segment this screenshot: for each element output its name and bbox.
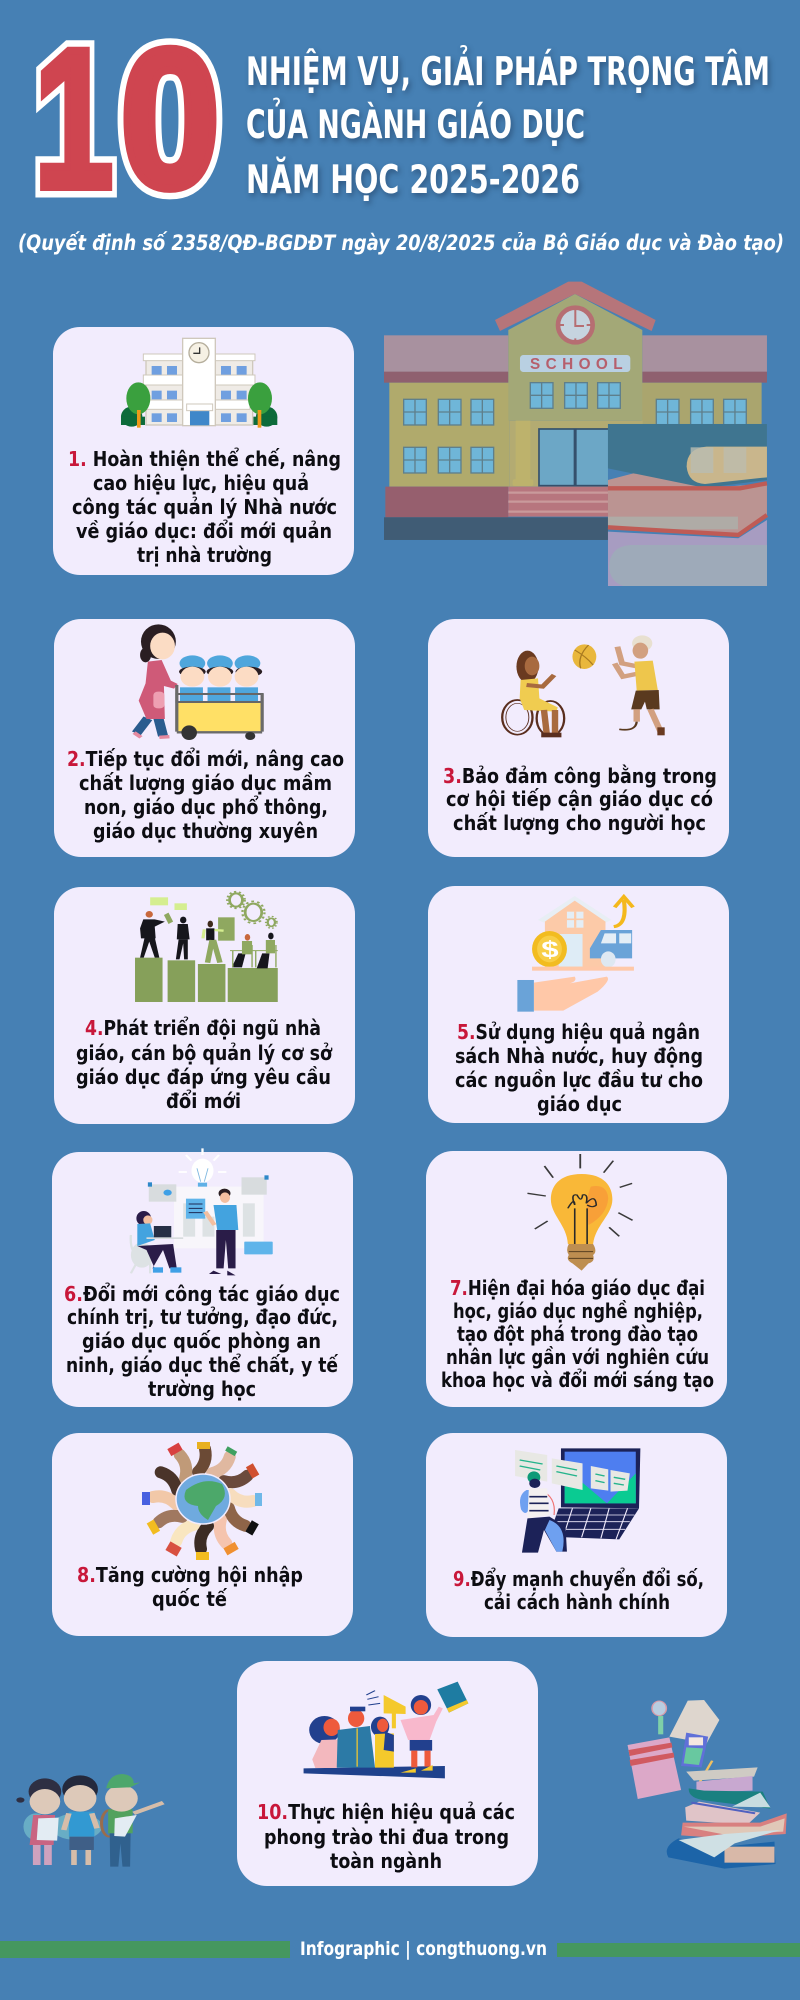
illustration: school with books: SCHOOL xyxy=(530,356,623,373)
icon: group with megaphone and book xyxy=(304,1682,468,1778)
text: task 9 xyxy=(453,1566,704,1614)
panel: task 7 xyxy=(426,1151,727,1407)
icon: bulb, dashboard and two people xyxy=(131,1148,273,1275)
icon: person using laptop with floating windows xyxy=(515,1448,640,1553)
panel: task 8 xyxy=(52,1433,353,1636)
icon: teacher pushing cart of children xyxy=(134,624,262,740)
panel: task 1 xyxy=(53,327,354,575)
illustration: school with books xyxy=(384,282,767,586)
text: task 8: 8.Tăng cường hội nhập xyxy=(77,1563,303,1587)
icon: teachers on green podiums with gears xyxy=(135,892,278,1002)
illustration: three children with papers xyxy=(16,1774,163,1867)
text: task 9: cải cách hành chính xyxy=(484,1590,670,1614)
title: CỦA NGÀNH GIÁO DỤC xyxy=(246,98,585,148)
text: task 7: 7.Hiện đại hóa giáo dục đại xyxy=(450,1276,705,1300)
title xyxy=(246,45,770,203)
text: task 1: trị nhà trường xyxy=(137,543,272,567)
text: task 9: 9.Đẩy mạnh chuyển đổi số, xyxy=(453,1566,704,1591)
text: task 10: 10.Thực hiện hiệu quả các xyxy=(257,1800,515,1824)
text: task 3: chất lượng cho người học xyxy=(453,811,706,835)
big number 10: 0 xyxy=(120,9,220,230)
title: NĂM HỌC 2025-2026 xyxy=(246,156,580,203)
icon: school building xyxy=(121,338,277,428)
text: task 5: giáo dục xyxy=(537,1092,622,1116)
text: task 8: quốc tế xyxy=(152,1587,228,1611)
text: task 6 xyxy=(64,1281,340,1401)
text: task 10: phong trào thi đua trong xyxy=(264,1825,509,1849)
footer bar left xyxy=(0,1941,290,1958)
text: task 1: 1. Hoàn thiện thể chế, nâng xyxy=(68,446,341,471)
text: task 5: sách Nhà nước, huy động xyxy=(455,1044,703,1068)
text: task 3 xyxy=(443,763,717,835)
text: task 2: 2.Tiếp tục đổi mới, nâng cao xyxy=(67,746,344,771)
text: task 7: tạo đột phá trong đào tạo xyxy=(457,1322,698,1346)
text: task 5: các nguồn lực đầu tư cho xyxy=(455,1068,703,1092)
panel: task 5 xyxy=(428,886,729,1123)
text: task 4: giáo, cán bộ quản lý cơ sở xyxy=(76,1041,333,1065)
text: task 5 xyxy=(455,1020,703,1116)
text: task 2: non, giáo dục phổ thông, xyxy=(84,794,328,819)
text: task 6: giáo dục quốc phòng an xyxy=(82,1329,321,1353)
text: task 4 xyxy=(76,1015,333,1113)
text: task 6: 6.Đổi mới công tác giáo dục xyxy=(64,1281,340,1306)
text: task 1 xyxy=(68,446,341,567)
footer bar right xyxy=(557,1943,800,1957)
text: task 5: 5.Sử dụng hiệu quả ngân xyxy=(457,1020,700,1044)
text: task 2 xyxy=(67,746,344,843)
big number 10: 1 xyxy=(34,8,113,229)
text: task 4: 4.Phát triển đội ngũ nhà xyxy=(85,1015,321,1040)
text: task 2: chất lượng giáo dục mầm xyxy=(79,771,332,795)
panel: task 4 xyxy=(54,887,355,1124)
text: task 10 xyxy=(257,1800,515,1873)
panel: task 3 xyxy=(428,619,729,857)
text: task 6: chính trị, tư tưởng, đạo đức, xyxy=(67,1305,338,1329)
text: task 4: giáo dục đáp ứng yêu cầu xyxy=(76,1065,331,1089)
text: task 1: công tác quản lý Nhà nước xyxy=(72,495,337,519)
panel: task 10 xyxy=(237,1661,538,1886)
panel: task 6 xyxy=(52,1148,353,1407)
text: task 6: trường học xyxy=(148,1377,256,1401)
text: task 6: ninh, giáo dục thể chất, y tế xyxy=(66,1352,339,1377)
text: task 4: đổi mới xyxy=(166,1088,241,1113)
text: task 8 xyxy=(77,1563,303,1611)
big number 10 xyxy=(34,8,220,230)
text: task 3: 3.Bảo đảm công bằng trong xyxy=(443,763,717,788)
big number 10: 0 xyxy=(120,9,220,230)
icon: hand holding house, coin and car: $ xyxy=(541,937,559,962)
icon: wheelchair user and man playing ball xyxy=(502,635,665,737)
text: task 7 xyxy=(441,1276,714,1392)
big number 10: 1 xyxy=(34,8,113,229)
text: task 10: toàn ngành xyxy=(330,1849,442,1873)
icon: hand holding house, coin and car xyxy=(517,896,634,1012)
text: task 1: cao hiệu lực, hiệu quả xyxy=(93,471,309,495)
panel: task 2 xyxy=(54,619,355,857)
footer text: Infographic | congthuong.vn xyxy=(300,1938,547,1960)
panel: task 9 xyxy=(426,1433,727,1637)
icon: globe ringed by hands xyxy=(142,1442,262,1560)
icon: light bulb xyxy=(527,1154,633,1271)
text: task 3: cơ hội tiếp cận giáo dục có xyxy=(446,787,713,811)
text: task 7: học, giáo dục nghề nghiệp, xyxy=(453,1299,703,1323)
text: task 1: về giáo dục: đổi mới quản xyxy=(76,518,332,543)
text: task 7: khoa học và đổi mới sáng tạo xyxy=(441,1367,714,1392)
illustration: stack of books and stationery xyxy=(628,1700,787,1869)
text: task 2: giáo dục thường xuyên xyxy=(93,819,318,843)
text: task 7: nhân lực gần với nghiên cứu xyxy=(446,1345,709,1369)
